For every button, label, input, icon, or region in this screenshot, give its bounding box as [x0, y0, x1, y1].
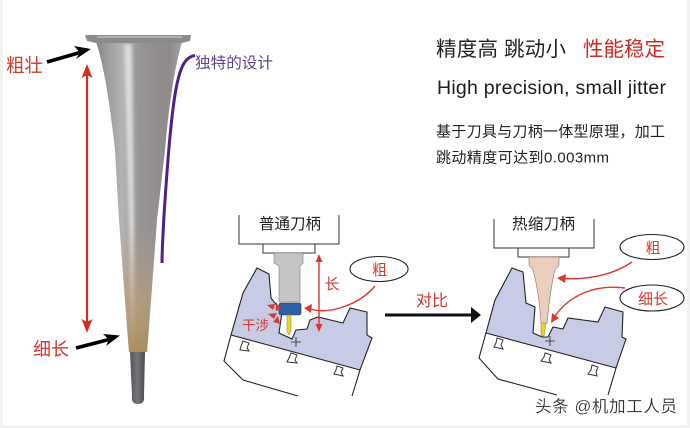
double arrow: long: [316, 254, 322, 332]
heading: 精度高: [436, 38, 498, 61]
clamps: shrink-fit: [494, 338, 598, 376]
heading: 性能稳定: [583, 38, 665, 61]
diagram: standard holder: [224, 215, 408, 396]
callout: 细长 shrink-fit: [620, 285, 684, 311]
spindle: standard holder: [239, 215, 339, 253]
description text: 基于刀具与刀柄一体型原理，加工: [436, 124, 665, 140]
label: 热缩刀柄: 热缩刀柄: [512, 215, 575, 233]
arrow: to slender end: [76, 334, 120, 348]
workpiece: standard: [231, 268, 372, 370]
callout: 粗 standard: 粗: [372, 262, 387, 279]
interference marks: [267, 302, 281, 324]
spindle: shrink-fit holder: [494, 219, 594, 257]
workpiece: shrink-fit: [486, 268, 626, 368]
tool assembly: shrink-fit: [529, 257, 559, 336]
arrow: thin holder pointer: [557, 262, 632, 283]
description text: [436, 124, 665, 166]
arrow: slender tip pointer: [551, 287, 625, 323]
arrow: to thick end: [47, 46, 91, 62]
heading: 跳动小: [504, 38, 566, 61]
crosshair: shrink-fit: [545, 336, 555, 346]
curve: unique design outline: [162, 56, 195, 263]
machine base: shrink-fit: [479, 333, 616, 395]
label: 长: 长: [324, 276, 340, 293]
comparison arrow: [385, 292, 481, 323]
diagram: shrink-fit holder: [479, 215, 684, 395]
label: 干涉: 干涉: [242, 318, 269, 333]
label: 细长: 细长: [33, 340, 69, 360]
callout: 粗 standard: [350, 256, 408, 282]
machine base: standard: [224, 335, 360, 396]
watermark: 头条 @机加工人员: [535, 397, 677, 416]
comparison arrow: 对比: [416, 292, 448, 310]
callout: 粗 shrink-fit: 粗: [646, 240, 661, 257]
description text: 跳动精度可达到0.003mm: [436, 150, 609, 166]
heading: [436, 38, 665, 61]
label: 粗壮: 粗壮: [6, 55, 43, 76]
arrow: thick collet pointer: [304, 286, 375, 313]
subheading: English: High precision, small jitter: [437, 77, 666, 99]
callout: 粗 shrink-fit: [620, 234, 684, 260]
clamps: standard: [240, 341, 343, 376]
label: 独特的设计: 独特的设计: [195, 54, 273, 72]
label: 普通刀柄: 普通刀柄: [259, 215, 321, 233]
callout: 细长 shrink-fit: 细长: [638, 291, 668, 308]
double arrow: holder length: [82, 64, 92, 333]
illustration: slender tool holder: [85, 35, 191, 404]
crosshair: standard: [291, 337, 301, 347]
tool assembly: standard: [274, 253, 303, 335]
